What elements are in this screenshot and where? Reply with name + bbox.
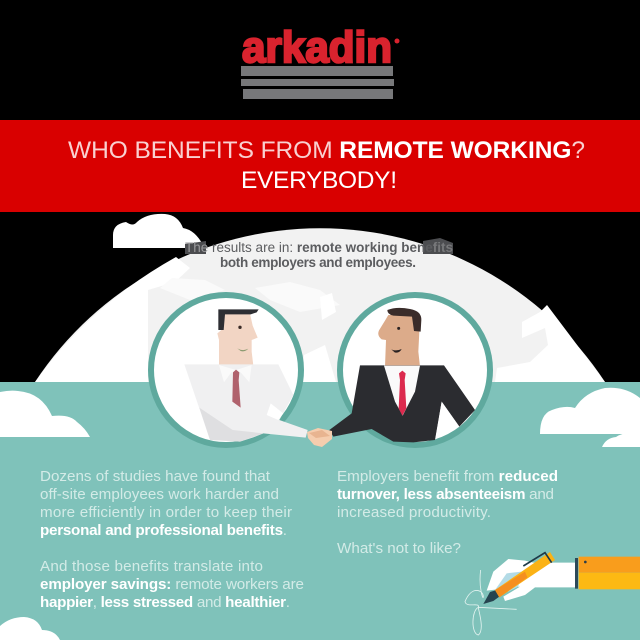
- hand: [487, 559, 575, 601]
- palm shadow: [495, 572, 522, 592]
- shirt shadow: [199, 408, 263, 442]
- left text block: more efficiently in order to keep their: [40, 504, 292, 521]
- head: [217, 314, 258, 366]
- cloud: bottom left: [0, 617, 60, 640]
- cuff: [575, 558, 578, 589]
- left text block: happier, less stressed and healthier.: [40, 594, 290, 611]
- eye: [397, 327, 400, 330]
- tie: [399, 371, 406, 416]
- mouth: [391, 349, 402, 353]
- hair: [218, 309, 259, 330]
- left text block: employer savings: remote workers are: [40, 576, 304, 593]
- left text block: And those benefits translate into: [40, 558, 263, 575]
- smile: [237, 348, 248, 351]
- intro text: The results are in: remote working benefits: [185, 240, 453, 255]
- cuff button: [584, 561, 587, 563]
- left text block: [40, 468, 304, 611]
- left text block: off-site employees work harder and: [40, 486, 279, 503]
- right text block: [337, 468, 558, 557]
- suit: [329, 365, 475, 442]
- logo: arkadin: arkadin: [242, 23, 392, 72]
- title banner: WHO BENEFITS FROM REMOTE WORKING?: [68, 137, 585, 164]
- cuff highlight: [267, 403, 283, 420]
- right employer in circle: [329, 295, 490, 445]
- left employee in circle: [151, 295, 308, 445]
- pen: [483, 590, 499, 604]
- handshake: [307, 428, 332, 447]
- head: [378, 315, 420, 367]
- title banner: [0, 120, 640, 212]
- title banner: EVERYBODY!: [241, 167, 397, 194]
- intro text: [185, 238, 453, 270]
- shirt: [184, 364, 308, 442]
- tie: [232, 370, 241, 408]
- sleeve: [579, 557, 640, 573]
- right text block: increased productivity.: [337, 504, 491, 521]
- cloud: right: [540, 388, 640, 434]
- shirt: [384, 366, 420, 416]
- right text block: What's not to like?: [337, 540, 461, 557]
- cloud: lower right: [602, 432, 640, 447]
- right text block: Employers benefit from reduced: [337, 468, 558, 485]
- pen clip: [523, 553, 552, 566]
- right text block: turnover, less absenteeism and: [337, 486, 554, 503]
- signing hand with pen: [465, 552, 640, 635]
- logo: arkadin: [241, 23, 400, 99]
- left text block: personal and professional benefits.: [40, 522, 287, 539]
- hair: [387, 308, 421, 332]
- collar: [219, 365, 252, 382]
- left text block: Dozens of studies have found that: [40, 468, 271, 485]
- intro text: both employers and employees.: [220, 255, 416, 270]
- cloud: top left: [113, 214, 205, 248]
- teal background: [0, 382, 640, 640]
- dome with world map: [35, 228, 605, 382]
- cloud: left: [0, 391, 90, 437]
- eye: [238, 326, 242, 329]
- arm gap: [435, 402, 459, 439]
- signature: [465, 570, 517, 635]
